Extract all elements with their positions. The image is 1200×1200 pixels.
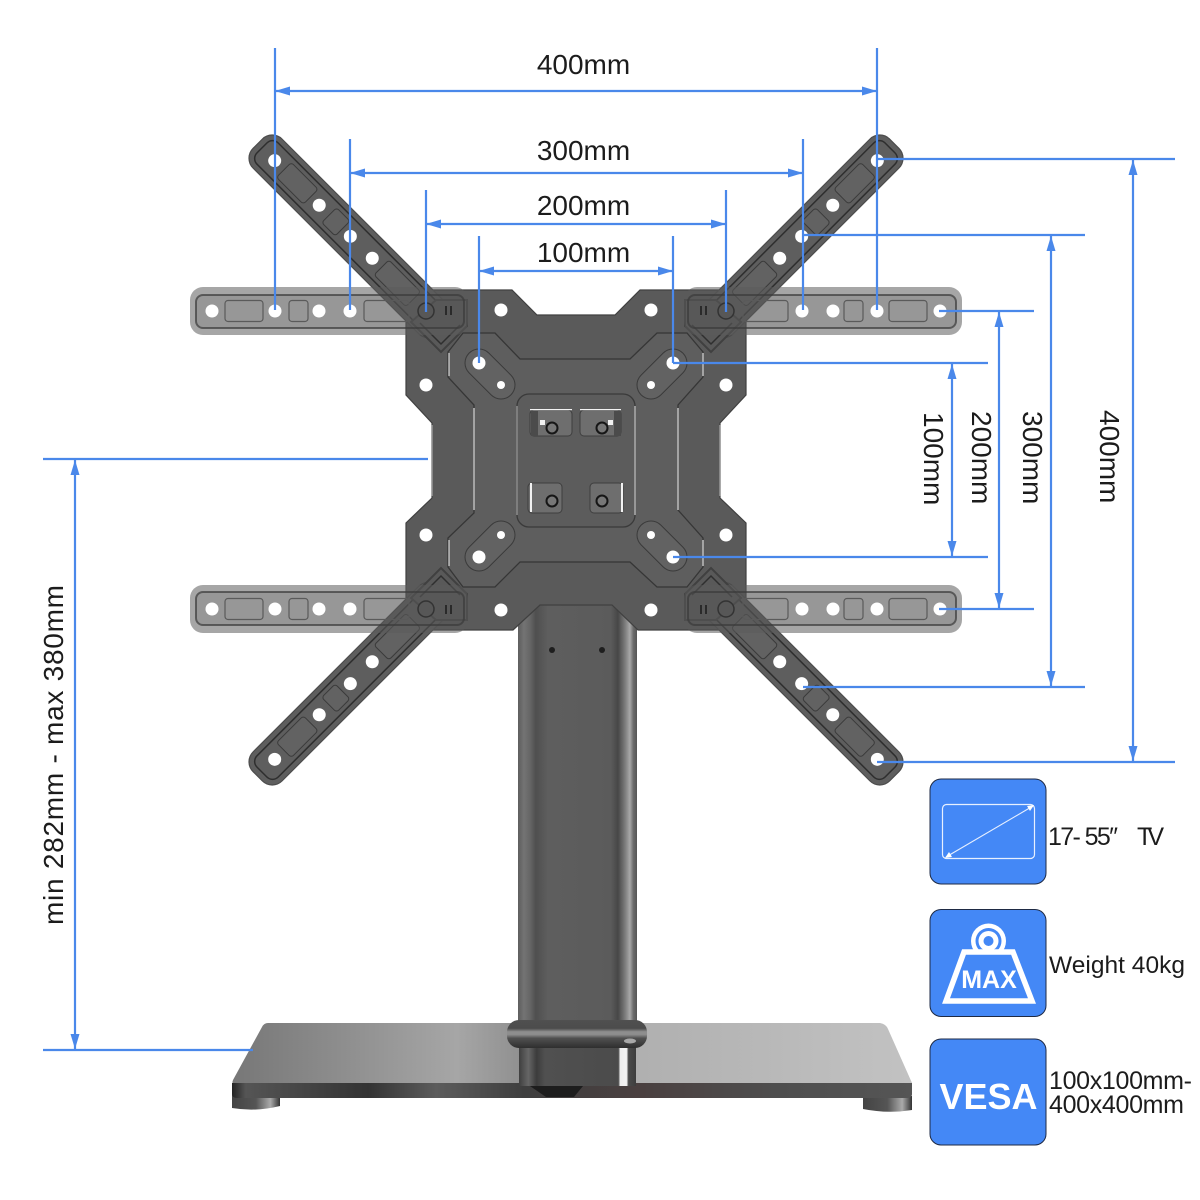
centre recess	[517, 394, 635, 527]
dimension: height 100mm: 100mm	[918, 412, 949, 505]
dimension: height 300mm	[803, 235, 1085, 687]
label: VESA sizes	[1049, 1067, 1192, 1119]
dimension: height 100mm	[673, 363, 988, 557]
lower column	[519, 1044, 636, 1086]
plate edge highlights	[449, 353, 703, 566]
dimension: height 300mm: 300mm	[1017, 411, 1048, 504]
dimension: height 200mm	[939, 311, 1034, 609]
icon: VESA	[930, 1039, 1046, 1145]
dimension: width 200mm	[426, 190, 726, 312]
arm: bottom right	[684, 568, 962, 791]
glass base	[232, 1023, 912, 1112]
upper column	[518, 604, 637, 1024]
dimension: height 400mm	[877, 159, 1175, 762]
dimension: width 100mm	[479, 236, 673, 363]
dimension: width 300mm	[350, 135, 803, 310]
foot right	[863, 1096, 912, 1112]
dimension: height 400mm: 400mm	[1094, 410, 1125, 503]
raised inner outline	[448, 333, 703, 587]
icon: max weight: MAX	[961, 966, 1017, 994]
collar	[507, 1020, 647, 1048]
label: VESA sizes: 400x400mm	[1049, 1091, 1184, 1119]
plate body	[406, 290, 746, 630]
column	[507, 604, 647, 1086]
foot left	[232, 1094, 280, 1110]
dimension: width 200mm: 200mm	[537, 190, 630, 221]
plate holes	[420, 304, 732, 616]
label: VESA sizes: 100x100mm-	[1049, 1067, 1192, 1095]
mounting plate	[406, 290, 746, 630]
label: TV size	[1048, 823, 1164, 851]
label: TV size: 17- 55″	[1048, 823, 1118, 851]
dimension: width 100mm: 100mm	[537, 237, 630, 268]
arm: bottom left	[190, 568, 468, 791]
obround pads	[479, 363, 673, 557]
icon: VESA: VESA	[939, 1076, 1038, 1117]
base top surface	[232, 1023, 912, 1086]
slot rings	[546, 422, 608, 506]
dimension: height 200mm: 200mm	[966, 411, 997, 504]
arm: top left	[190, 129, 468, 352]
hook slot windows	[528, 410, 623, 513]
dimension: stand height	[38, 459, 428, 1050]
column screw holes	[549, 647, 605, 653]
arm: top right	[684, 129, 962, 352]
icon: max weight	[930, 910, 1046, 1016]
label: weight: Weight 40kg	[1049, 952, 1185, 979]
collar highlight	[624, 1038, 636, 1044]
dimension: width 400mm: 400mm	[537, 49, 630, 80]
label: TV size: TV	[1137, 823, 1164, 851]
base reflection	[530, 1086, 583, 1097]
dimension: width 400mm	[275, 48, 877, 310]
dimension: width 300mm: 300mm	[537, 135, 630, 166]
icon: TV size	[930, 779, 1046, 884]
base front edge	[232, 1083, 912, 1098]
dimension: stand height: min 282mm - max 380mm	[38, 585, 69, 925]
